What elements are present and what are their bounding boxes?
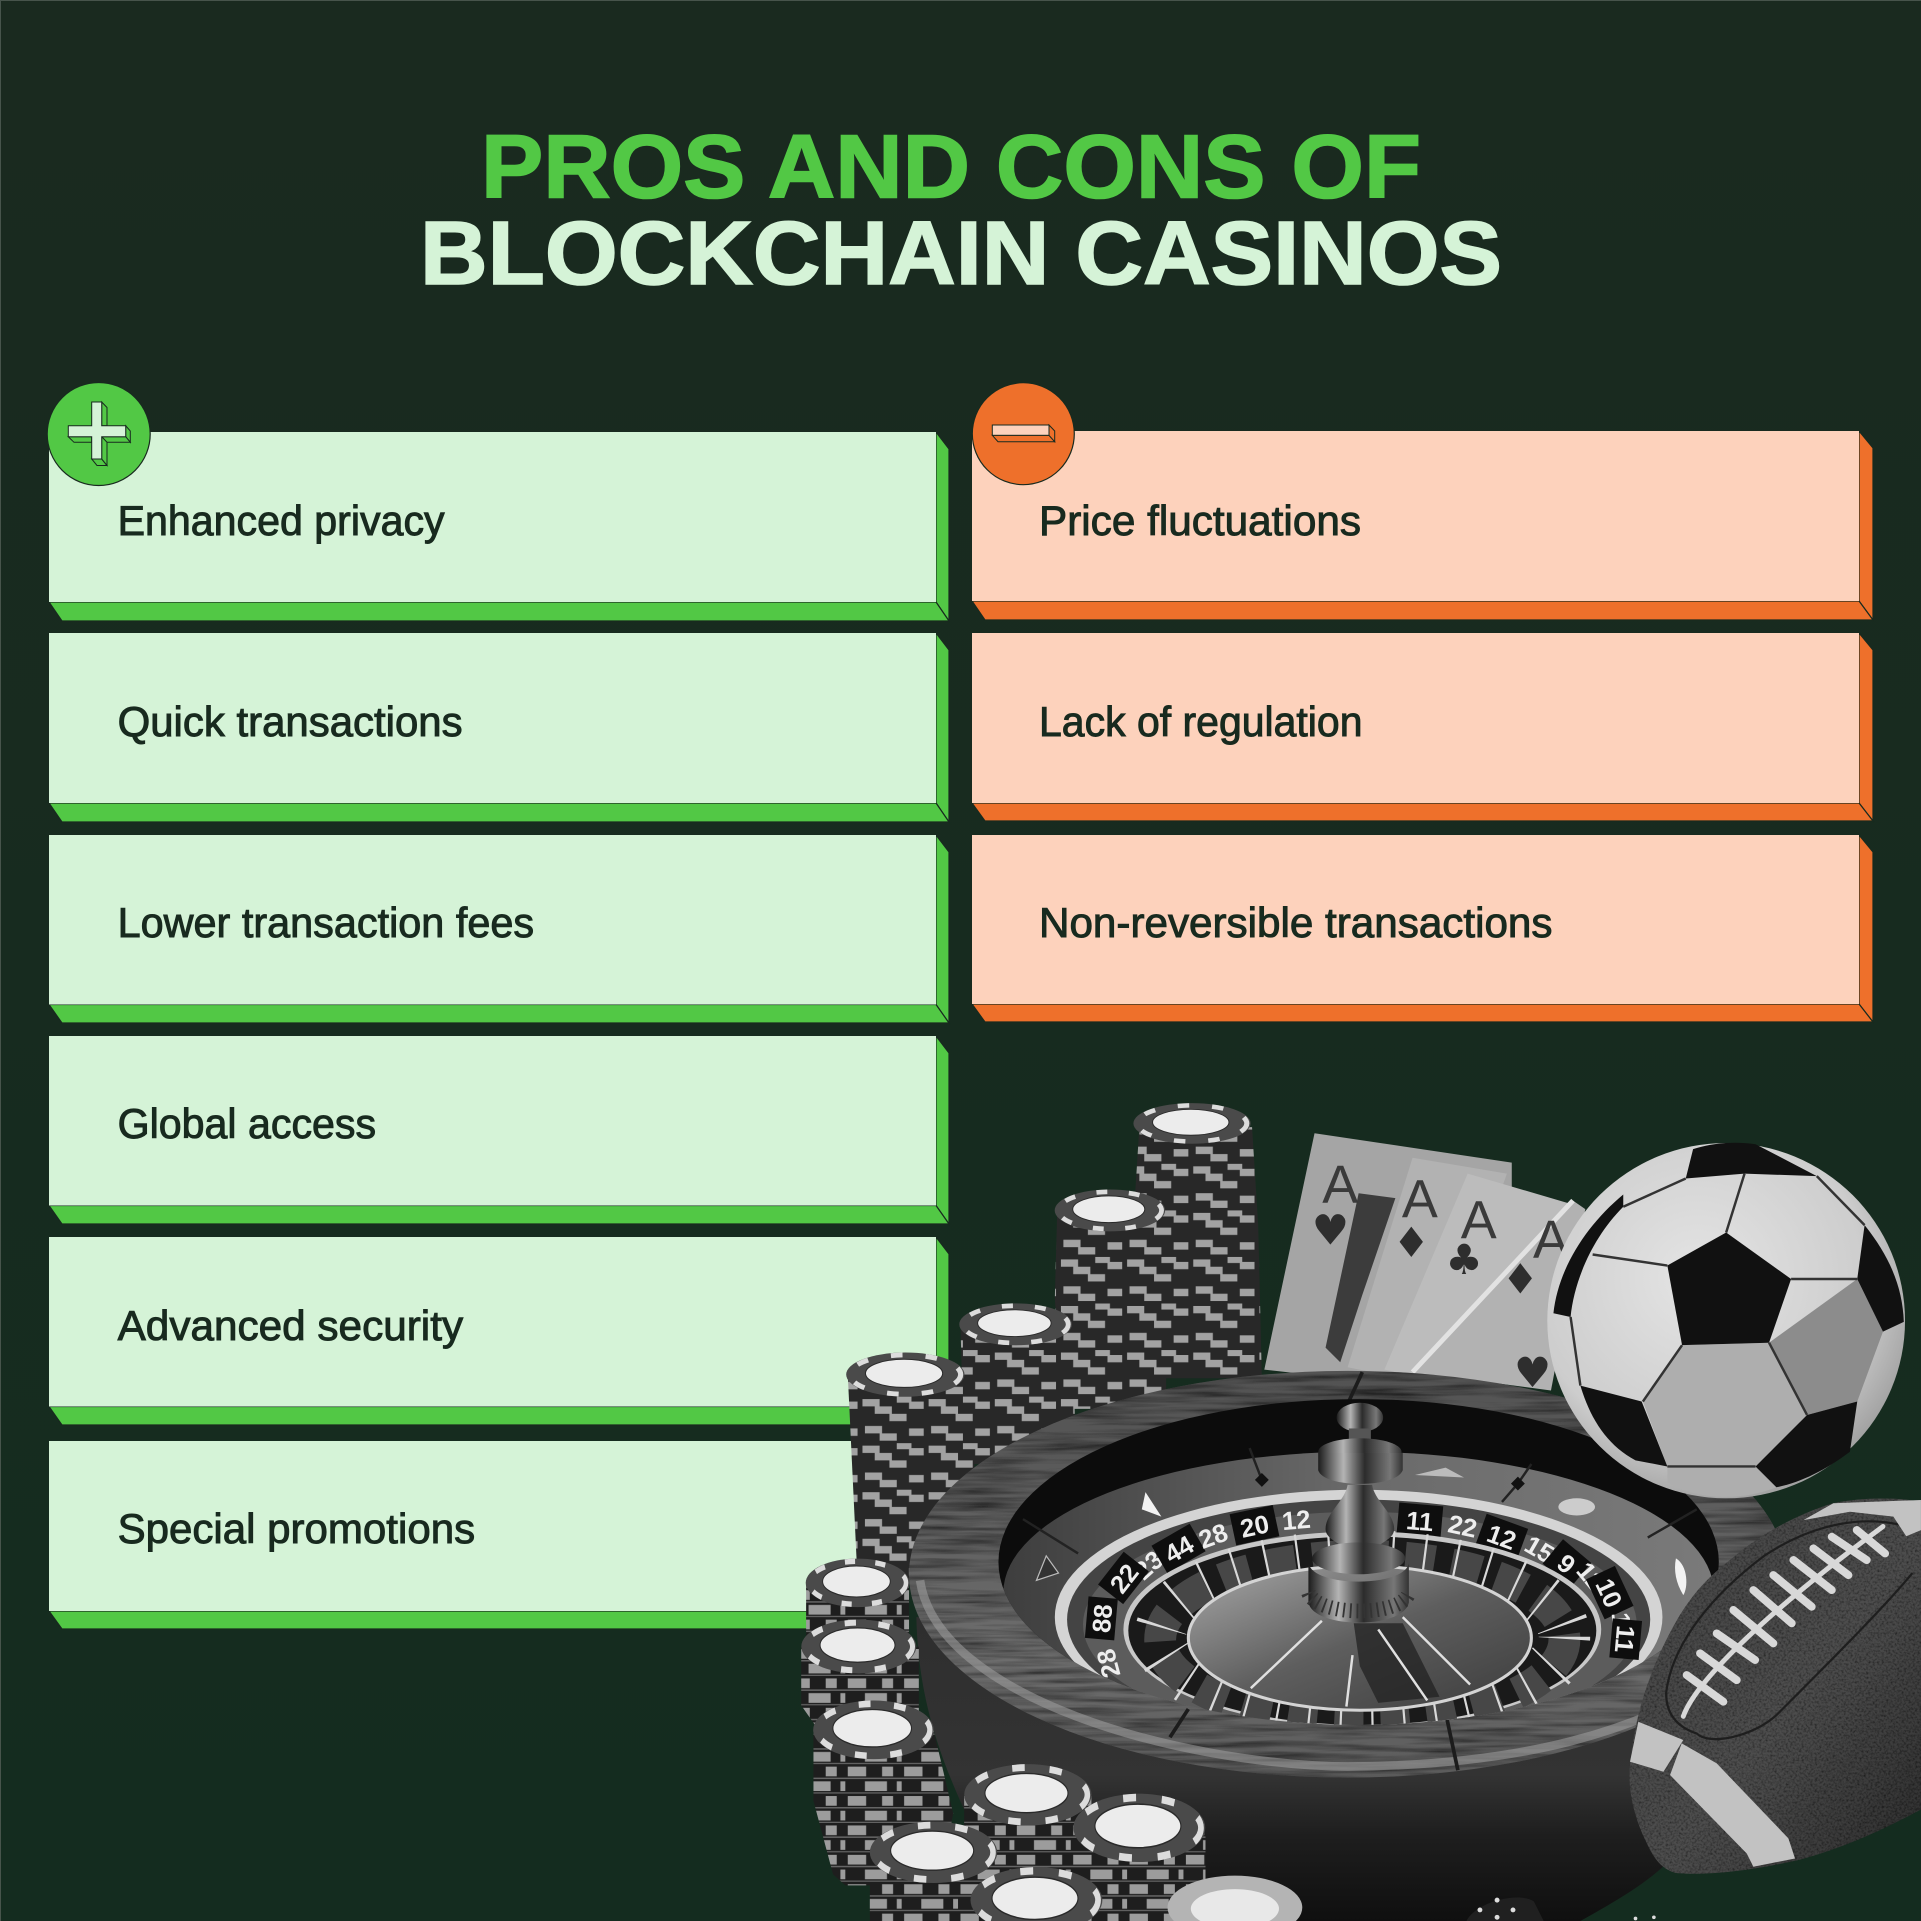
- number band: [1083, 1512, 1637, 1737]
- card indices: [1312, 1155, 1569, 1397]
- wooden rim: [909, 1371, 1786, 1778]
- chip: front left: [870, 1822, 997, 1921]
- illustration: casino and sports objects: [801, 1103, 1921, 1921]
- number cell 22 left: [1098, 1552, 1149, 1604]
- chip stack: lower left small: [806, 1559, 909, 1648]
- inner well: [998, 1399, 1719, 1725]
- title: [420, 117, 1502, 304]
- number cell 88 left: [1085, 1596, 1119, 1640]
- rim seams: [1170, 1372, 1458, 1770]
- card indices: A: [1322, 1155, 1358, 1215]
- pro card: Global access: [49, 1036, 949, 1224]
- number cell 88 left: 88: [1088, 1603, 1118, 1634]
- pro card: Quick transactions: Quick transactions: [118, 698, 463, 745]
- pro card: Special promotions: Special promotions: [118, 1505, 475, 1552]
- ball mid panels: [1643, 1343, 1807, 1497]
- number cell 20: [1230, 1505, 1279, 1545]
- football stripes: [1630, 1500, 1921, 1867]
- chip stack: left front: [846, 1353, 976, 1580]
- wooden bowl: [1004, 1452, 1712, 1686]
- centre cone: [1188, 1566, 1531, 1710]
- pocket dividers: [1160, 1556, 1564, 1718]
- icon: plus badge: [47, 382, 150, 486]
- silver ring: [1055, 1490, 1662, 1745]
- number cell 10: [1586, 1566, 1634, 1619]
- number cell 11 lower: 11: [1609, 1624, 1639, 1654]
- pro card: Lower transaction fees: [49, 835, 949, 1023]
- panel: cons: [972, 431, 1873, 1022]
- title: PROS AND CONS OF: [481, 117, 1421, 217]
- card indices: ♦: [1393, 1218, 1430, 1267]
- chip stack: second back: [1055, 1189, 1166, 1409]
- card indices: ♥: [1514, 1348, 1551, 1397]
- card indices: A: [1402, 1170, 1438, 1230]
- football laces: [1683, 1526, 1885, 1716]
- lace panel contour: [1666, 1521, 1912, 1739]
- number cell 22 left: 22: [1105, 1559, 1145, 1599]
- number cell 1: 1: [1606, 1611, 1635, 1628]
- card indices: A: [1533, 1210, 1569, 1270]
- number cell 12: 12: [1281, 1506, 1312, 1536]
- pro card: Advanced security: [49, 1237, 949, 1425]
- chip: front bottom: [970, 1867, 1103, 1921]
- number cell 12 right: [1476, 1514, 1528, 1559]
- number cell 23: 23: [1129, 1546, 1169, 1586]
- american football: [1629, 1498, 1921, 1874]
- con card: Lack of regulation: [972, 633, 1873, 821]
- dice: [1466, 1898, 1656, 1921]
- card indices: ♦: [1502, 1255, 1539, 1304]
- panel: pros: [49, 432, 949, 1629]
- bowl markers: [1036, 1468, 1686, 1595]
- number cell 44: [1151, 1524, 1206, 1573]
- chip: light bottom: [1168, 1876, 1302, 1921]
- card indices: ♥: [1312, 1206, 1349, 1255]
- ball grey panels: [1769, 1279, 1883, 1415]
- card indices: ♣: [1445, 1235, 1483, 1284]
- pocket floor: [1160, 1556, 1564, 1722]
- title: BLOCKCHAIN CASINOS: [420, 204, 1502, 304]
- ball black panels: [1553, 1143, 1904, 1487]
- chip: front right: [1073, 1794, 1205, 1921]
- roulette wheel: [909, 1371, 1786, 1921]
- con card: Price fluctuations: [972, 431, 1873, 620]
- chip stack: tall back: [1133, 1103, 1262, 1378]
- number cell 15: 15: [1520, 1531, 1558, 1569]
- pro card: Enhanced privacy: Enhanced privacy: [118, 497, 445, 544]
- number cell 11: 11: [1405, 1507, 1435, 1537]
- number cell 22: 22: [1445, 1510, 1479, 1544]
- pro card: Lower transaction fees: Lower transaction fees: [118, 899, 534, 946]
- number cell 9: [1543, 1539, 1591, 1587]
- number cell 11 lower: [1608, 1618, 1642, 1660]
- number cell 11 right: 11: [1571, 1557, 1609, 1596]
- con card: Non-reversible transactions: [972, 835, 1873, 1022]
- pro card: Special promotions: [49, 1441, 860, 1629]
- number cell 28 lower left: 28: [1092, 1646, 1126, 1681]
- con card: Lack of regulation: Lack of regulation: [1039, 698, 1362, 745]
- number cell 12 right: 12: [1483, 1520, 1520, 1556]
- pocket ring: [1128, 1536, 1596, 1725]
- pro card: Advanced security: Advanced security: [118, 1302, 463, 1349]
- wheel base: [916, 1617, 1715, 1921]
- icon: minus badge: [972, 383, 1074, 485]
- chip stack: lower left medium: [801, 1620, 919, 1730]
- pro card: Quick transactions: [49, 633, 949, 822]
- number cell 44: 44: [1160, 1530, 1199, 1569]
- wheel numbers: [1085, 1503, 1642, 1681]
- card indices: A: [1461, 1191, 1497, 1251]
- ring groove: [1067, 1500, 1650, 1740]
- number cell 28: 28: [1195, 1519, 1232, 1555]
- cone shadow: [1354, 1623, 1439, 1703]
- wheel interior: [1003, 1448, 1714, 1745]
- chip: front centre: [964, 1764, 1092, 1874]
- con card: Non-reversible transactions: Non-reversible transactions: [1039, 899, 1552, 946]
- pro card: Enhanced privacy: [49, 432, 949, 621]
- chip stack: third: [959, 1303, 1076, 1464]
- pocket ring edge: [1123, 1531, 1601, 1727]
- number cell 9: 9: [1551, 1549, 1580, 1580]
- soccer ball: [1547, 1143, 1905, 1498]
- cone spokes: [1251, 1617, 1470, 1707]
- con card: Price fluctuations: Price fluctuations: [1039, 497, 1361, 544]
- ball seams: [1571, 1174, 1865, 1466]
- number cell 10: 10: [1589, 1575, 1627, 1612]
- number cell 20: 20: [1238, 1510, 1272, 1544]
- rim lip highlight: [920, 1580, 1740, 1767]
- pro card: Global access: Global access: [118, 1100, 376, 1147]
- chip stack: lower left tall: [813, 1701, 953, 1885]
- spindle: [1308, 1403, 1409, 1623]
- number cell 11: [1397, 1503, 1443, 1538]
- playing cards: [1264, 1133, 1585, 1397]
- bowl lines: [1023, 1448, 1697, 1553]
